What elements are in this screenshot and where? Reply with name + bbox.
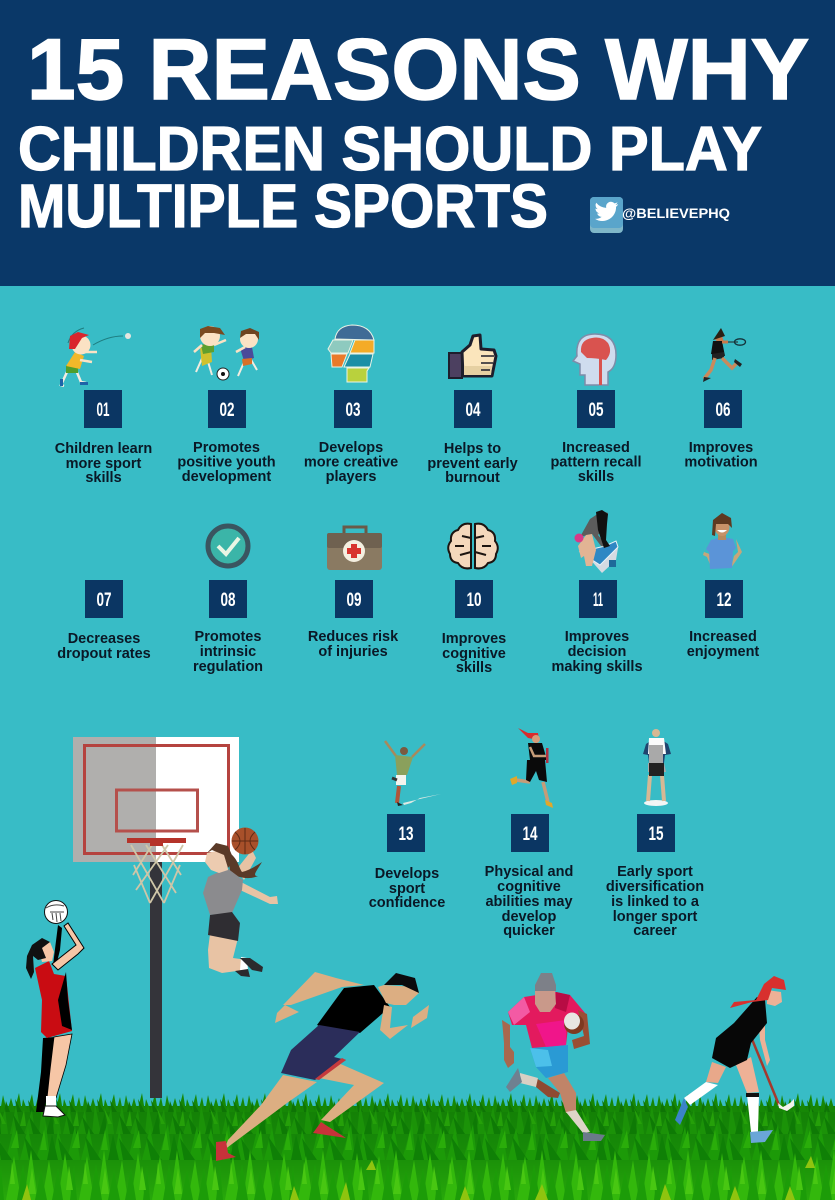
number box 15: 15 <box>648 824 664 845</box>
label 02: development <box>182 469 271 485</box>
shorts <box>208 912 240 941</box>
reason 03 <box>304 325 398 485</box>
label 14: abilities may <box>485 894 573 910</box>
front leg <box>319 1062 384 1122</box>
number box 11 <box>579 580 617 618</box>
number box 03 <box>334 390 372 428</box>
number box 11: 11 <box>593 590 603 611</box>
number box 01 <box>84 390 122 428</box>
label 03: more creative <box>304 454 398 470</box>
front shoe <box>583 1132 605 1141</box>
far leg <box>36 1037 55 1112</box>
label 01: more sport <box>66 456 142 472</box>
label 07: Decreases <box>68 631 140 647</box>
illustration: hockey player <box>675 976 794 1143</box>
label 14: develop <box>502 909 557 925</box>
front sock <box>566 1110 590 1133</box>
reason 11 <box>551 510 643 675</box>
label 13: sport <box>389 881 425 897</box>
number box 10: 10 <box>466 590 482 611</box>
pole <box>150 862 162 1098</box>
label 02: positive youth <box>177 454 276 470</box>
front shoe <box>750 1130 773 1143</box>
label 10: skills <box>456 660 492 676</box>
icon: child throwing ball <box>60 328 131 386</box>
icon: thumbs up <box>449 335 496 378</box>
icon: tennis player <box>703 328 746 382</box>
stick <box>747 1027 779 1105</box>
number box 03: 03 <box>346 400 360 421</box>
number box 04: 04 <box>466 400 481 421</box>
icon: swimmer on starting block <box>574 510 618 573</box>
raised arm <box>52 923 84 970</box>
head <box>535 990 556 1012</box>
ball <box>564 1012 584 1034</box>
head <box>767 990 782 1006</box>
shirt <box>203 868 243 915</box>
label 09: Reduces risk <box>308 629 399 645</box>
illustration: sprinter <box>216 972 429 1161</box>
number box 04 <box>454 390 492 428</box>
icon: smiling woman <box>703 513 742 569</box>
icon: first aid case <box>327 527 382 570</box>
label 03: Develops <box>319 440 383 456</box>
number box 05: 05 <box>588 400 604 421</box>
illustration: rugby player <box>502 973 605 1141</box>
label 02: Promotes <box>193 440 260 456</box>
number box 12 <box>705 580 743 618</box>
header banner <box>0 0 835 286</box>
icon: check mark badge <box>208 526 248 566</box>
rim <box>127 838 186 846</box>
right arm <box>572 1010 590 1049</box>
icon: celebrating athlete <box>385 741 441 806</box>
label 15: diversification <box>606 879 704 895</box>
rear shoe <box>506 1068 522 1092</box>
label 10: Improves <box>442 631 506 647</box>
back arm and hand <box>275 972 364 1023</box>
number box 08 <box>209 580 247 618</box>
reason 07 <box>57 580 151 662</box>
label 05: skills <box>578 469 614 485</box>
label 12: Increased <box>689 629 757 645</box>
rear sock <box>520 1073 538 1087</box>
icon: brain <box>448 524 498 568</box>
number box 01: 01 <box>96 400 110 421</box>
far arm <box>53 925 62 966</box>
icon: twitter <box>590 197 623 233</box>
label 15: Early sport <box>617 864 693 880</box>
label 04: prevent early <box>427 456 518 472</box>
reason 06 <box>684 328 758 470</box>
label 11: making skills <box>551 659 643 675</box>
near leg <box>47 1034 72 1098</box>
label 10: cognitive <box>442 646 506 662</box>
reason 14 <box>485 728 573 939</box>
label 04: Helps to <box>444 441 501 457</box>
arms and hands <box>757 1000 770 1066</box>
label 15: career <box>633 923 677 939</box>
socks and shoes <box>240 957 248 970</box>
stick head <box>778 1099 794 1111</box>
twitter handle: @BELIEVEPHQ <box>622 206 730 221</box>
kit <box>712 997 767 1068</box>
jersey <box>508 992 585 1048</box>
illustration: netball player <box>26 900 84 1117</box>
number box 06: 06 <box>716 400 730 421</box>
reason 13 <box>369 741 445 911</box>
label 06: Improves <box>689 440 753 456</box>
label 14: quicker <box>503 923 555 939</box>
title line 2: CHILDREN SHOULD PLAY <box>18 115 762 184</box>
number box 09: 09 <box>346 590 362 611</box>
icon: two children with football <box>194 326 259 380</box>
label 05: pattern recall <box>550 454 642 470</box>
number box 12: 12 <box>716 590 732 611</box>
reason 05 <box>550 334 642 485</box>
number box 13 <box>387 814 425 852</box>
label 13: confidence <box>369 895 445 911</box>
grass <box>0 1092 835 1200</box>
shoes <box>216 1122 346 1161</box>
number box 15 <box>637 814 675 852</box>
number box 05 <box>577 390 615 428</box>
number box 02: 02 <box>220 400 234 421</box>
reason 04 <box>427 335 518 486</box>
reason 02 <box>177 326 276 485</box>
illustration: basketball hoop <box>73 737 239 1098</box>
label 14: Physical and <box>485 864 573 880</box>
label 01: skills <box>85 470 122 486</box>
legs <box>208 934 247 973</box>
rear sock <box>684 1082 718 1105</box>
netball <box>44 900 68 924</box>
hair <box>384 973 419 993</box>
net <box>131 845 183 903</box>
number box 14: 14 <box>522 824 538 845</box>
icon: relay runner <box>510 728 553 808</box>
reason 12 <box>687 513 759 660</box>
shorts <box>530 1045 568 1078</box>
front sock <box>747 1095 759 1132</box>
reason 08 <box>193 526 263 675</box>
label 12: enjoyment <box>687 644 759 660</box>
shorts trim <box>315 1058 346 1080</box>
label 15: is linked to a <box>611 894 700 910</box>
label 08: Promotes <box>195 629 261 645</box>
number box 06 <box>704 390 742 428</box>
head <box>205 849 228 873</box>
icon: standing athlete with towel <box>643 729 671 806</box>
dress <box>35 961 72 1038</box>
rear leg <box>224 1075 317 1150</box>
basketball <box>232 828 258 854</box>
arm <box>240 882 278 904</box>
head and hair <box>38 942 54 962</box>
ponytail <box>228 852 262 878</box>
label 11: Improves <box>565 629 629 645</box>
reason 15 <box>606 729 704 939</box>
label 06: motivation <box>684 454 758 470</box>
label 08: intrinsic <box>200 644 256 660</box>
label 11: decision <box>568 644 626 660</box>
reason 10 <box>442 524 506 676</box>
label 07: dropout rates <box>57 646 151 662</box>
illustration: jumping basketball player <box>203 828 278 977</box>
title line 1: 15 REASONS WHY <box>27 22 809 118</box>
backboard <box>73 737 239 862</box>
icon: head with brain <box>573 334 616 385</box>
label 08: regulation <box>193 659 263 675</box>
number box 07: 07 <box>96 590 112 611</box>
front arm and hand <box>380 1005 429 1039</box>
label 01: Children learn <box>55 441 152 457</box>
rear thigh <box>706 1062 726 1083</box>
hair <box>535 973 556 991</box>
reason 09 <box>308 527 399 660</box>
label 03: players <box>326 469 376 485</box>
icon: colourful head <box>328 325 374 382</box>
left arm <box>502 1020 514 1068</box>
label 09: of injuries <box>318 644 388 660</box>
number box 02 <box>208 390 246 428</box>
label 04: burnout <box>445 470 500 486</box>
shorts <box>281 1025 360 1080</box>
red hair <box>730 976 786 1008</box>
torso <box>317 985 390 1033</box>
number box 10 <box>455 580 493 618</box>
number box 08: 08 <box>220 590 236 611</box>
reason 01 <box>55 328 152 486</box>
sock and shoe <box>46 1096 56 1108</box>
rear leg <box>536 1078 560 1098</box>
number box 14 <box>511 814 549 852</box>
far arm to ball <box>236 850 256 880</box>
head <box>378 985 419 1005</box>
title line 3: MULTIPLE SPORTS <box>18 172 548 240</box>
label 14: cognitive <box>497 879 561 895</box>
label 05: Increased <box>562 440 630 456</box>
number box 13: 13 <box>398 824 414 845</box>
label 13: Develops <box>375 866 439 882</box>
label 15: longer sport <box>613 909 697 925</box>
rear shoe <box>675 1098 688 1125</box>
front leg <box>548 1073 576 1113</box>
front thigh <box>736 1057 759 1093</box>
